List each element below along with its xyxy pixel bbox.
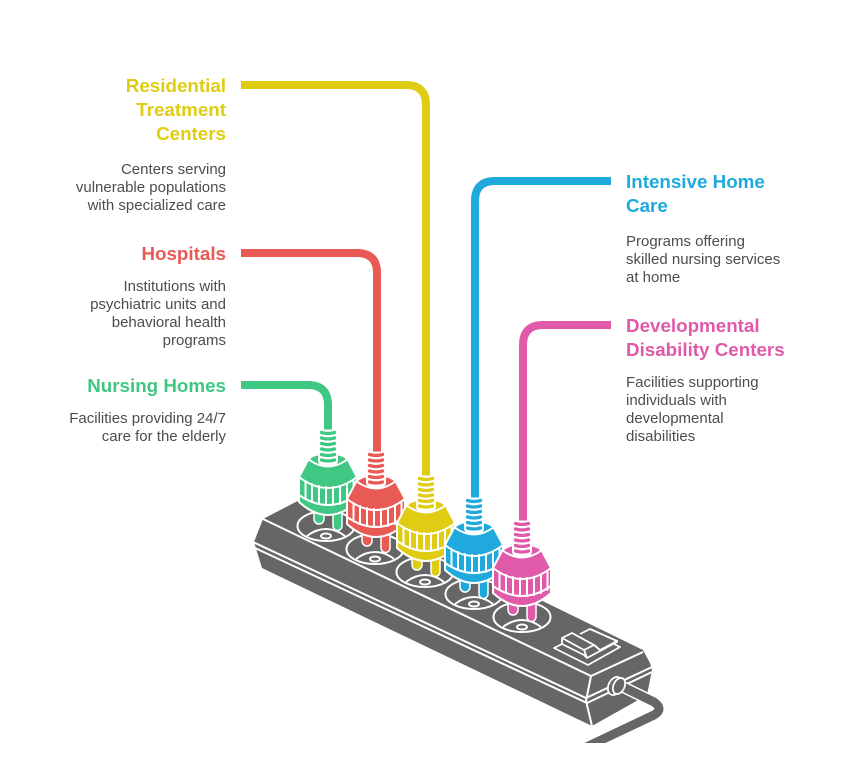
sockets: [298, 511, 550, 632]
text: nursing homes: care for the elderly: [102, 428, 226, 445]
heading: developmental disability centers: Disability Centers: [626, 339, 785, 360]
connector: nursing homes: [241, 385, 328, 434]
plug: hospitals: [347, 452, 405, 552]
text: developmental disability centers: [626, 374, 759, 445]
text: developmental disability centers: individuals with: [626, 392, 727, 409]
heading: developmental disability centers: Developmental: [626, 315, 760, 336]
plug: residential treatment centers: [397, 476, 455, 576]
text: intensive home care: skilled nursing services: [626, 251, 780, 268]
strip body: [253, 491, 652, 726]
heading: intensive home care: Intensive Home: [626, 171, 765, 192]
text: hospitals: psychiatric units and: [90, 296, 226, 313]
plug: developmental disability centers: [493, 520, 551, 622]
heading: nursing homes: Nursing Homes: [87, 375, 226, 396]
text: developmental disability centers: disabilities: [626, 428, 695, 445]
plug: nursing homes: [299, 430, 357, 530]
text: residential treatment centers: Centers serving: [121, 161, 226, 178]
text: residential treatment centers: [76, 161, 226, 214]
text: hospitals: Institutions with: [123, 278, 226, 295]
connector: residential treatment centers: [241, 85, 426, 480]
heading: residential treatment centers: Residential: [126, 75, 226, 96]
heading: residential treatment centers: Centers: [156, 123, 226, 144]
text: intensive home care: [626, 233, 780, 286]
text: nursing homes: [69, 410, 226, 445]
text: developmental disability centers: Facilities supporting: [626, 374, 759, 391]
power strip illustration: [241, 81, 664, 743]
text: hospitals: [90, 278, 226, 349]
connector: hospitals: [241, 253, 377, 456]
heading: intensive home care: [626, 171, 765, 216]
text: residential treatment centers: vulnerable populations: [76, 179, 226, 196]
power switch: [554, 629, 620, 665]
connector: developmental disability centers: [523, 325, 611, 525]
heading: residential treatment centers: [126, 75, 226, 144]
text: developmental disability centers: developmental: [626, 410, 724, 427]
heading: hospitals: Hospitals: [141, 243, 226, 264]
plug: intensive home care: [445, 498, 503, 598]
connector: intensive home care: [475, 181, 611, 502]
heading: residential treatment centers: Treatment: [136, 99, 226, 120]
text: intensive home care: Programs offering: [626, 233, 745, 250]
text: hospitals: behavioral health: [112, 314, 226, 331]
text: hospitals: programs: [163, 332, 226, 349]
text: intensive home care: at home: [626, 269, 680, 286]
text: residential treatment centers: with specialized care: [88, 197, 226, 214]
heading: intensive home care: Care: [626, 195, 668, 216]
text: nursing homes: Facilities providing 24/7: [69, 410, 226, 427]
power cord: [584, 676, 664, 743]
heading: developmental disability centers: [626, 315, 785, 360]
